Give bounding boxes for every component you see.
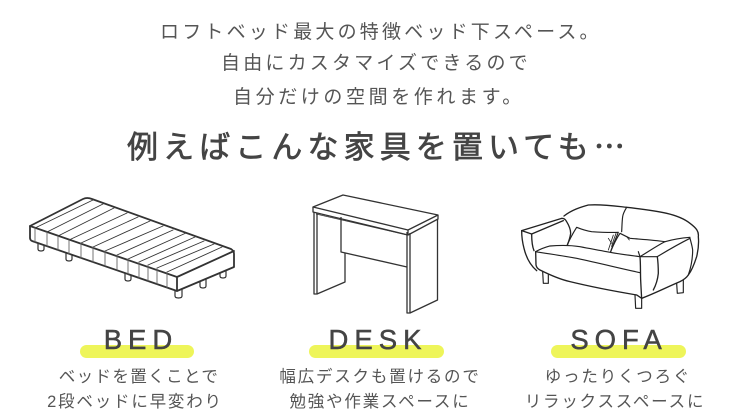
caption: bed [47,368,223,411]
caption: desk: 幅広デスクも置けるので [279,368,481,386]
caption: bed: 2段ベッドに早変わり [47,393,223,411]
intro text: 自由にカスタマイズできるので [221,53,531,74]
caption: sofa [525,368,705,411]
highlight: sofa [551,345,686,358]
highlight: bed [80,345,194,358]
intro text [160,22,602,108]
heading: 例えばこんな家具を置いても… [127,122,630,167]
caption: sofa: リラックススペースに [525,393,705,411]
caption: sofa: ゆったりくつろぐ [545,368,691,386]
highlight: desk [309,345,444,358]
caption: bed: ベッドを置くことで [59,368,219,386]
label: DESK: DESK [329,324,427,355]
intro text: ロフトベッド最大の特徴ベッド下スペース。 [160,22,602,43]
caption: desk [279,368,481,411]
caption: desk: 勉強や作業スペースに [289,393,471,411]
intro text: 自分だけの空間を作れます。 [233,87,525,108]
label: BED: BED [104,324,178,355]
label: SOFA: SOFA [570,324,668,355]
